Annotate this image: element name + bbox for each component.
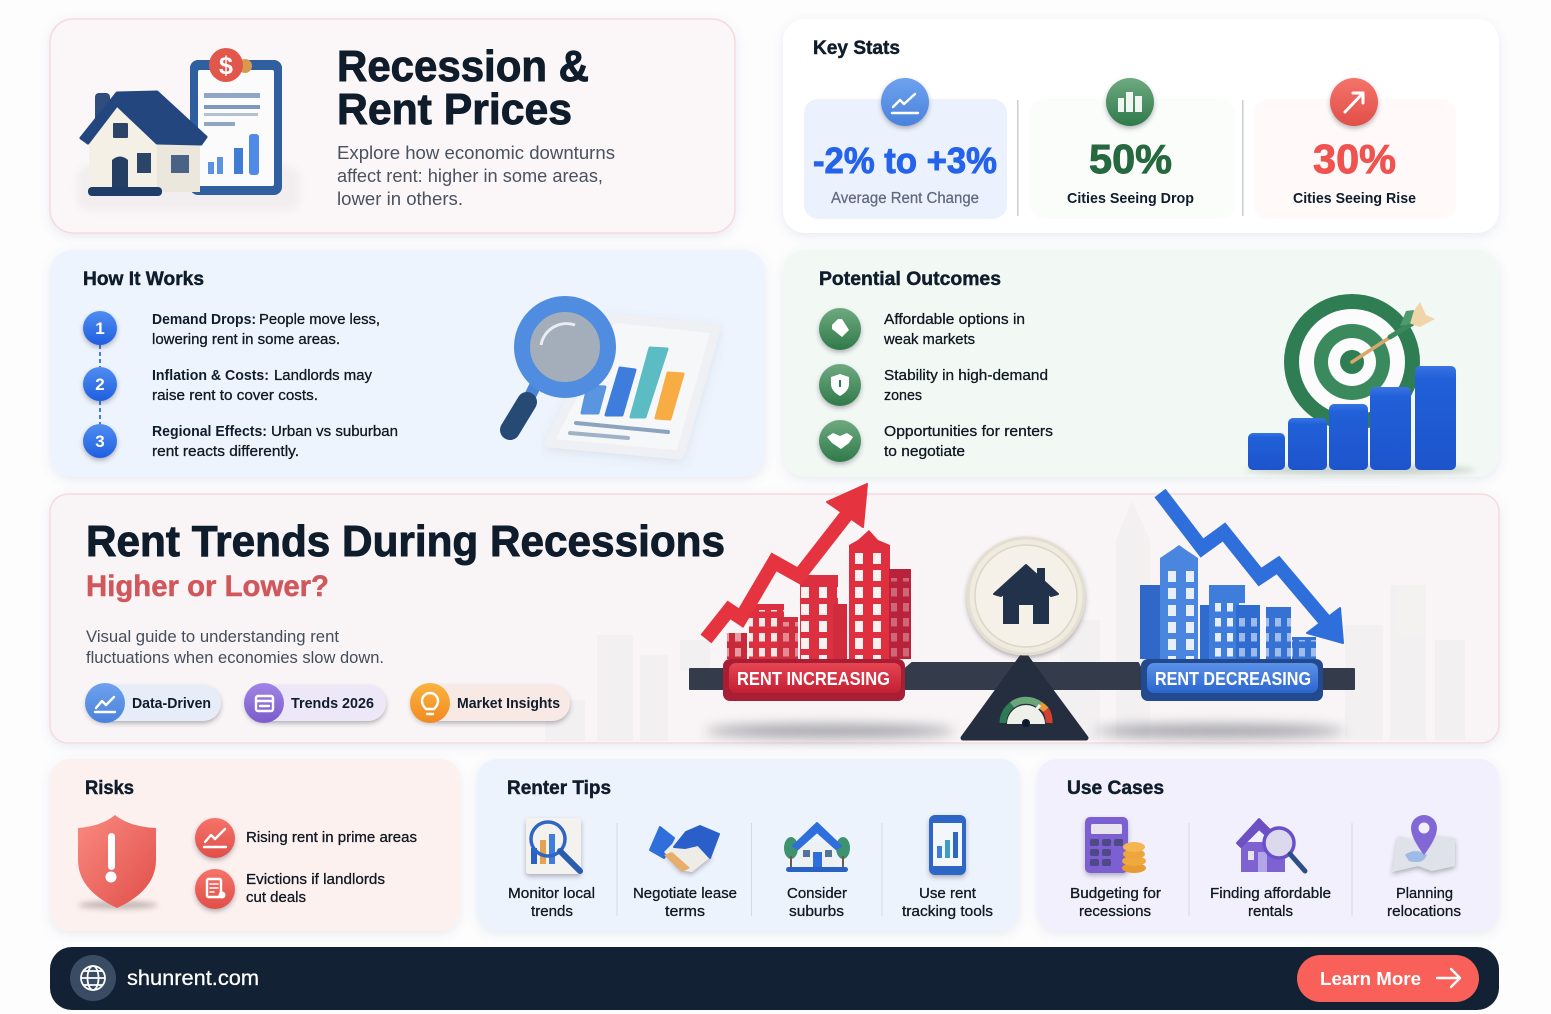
tip: monitor local trends: Monitor local [508,886,595,902]
outcome 2: zones [884,388,922,404]
risk 2: cut deals [246,890,306,906]
tip: consider suburbs: suburbs [789,904,844,920]
step 2 [83,367,373,404]
step 2: raise rent to cover costs. [152,388,318,404]
description: fluctuations when economies slow down. [86,649,384,667]
step 3: rent reacts differently. [152,444,299,460]
step 1: Demand Drops: [152,312,256,328]
risk 2 [195,869,385,909]
outcome 1: weak markets [883,332,975,348]
tip: monitor local trends: trends [531,904,573,920]
use case: finding rentals: rentals [1248,904,1293,920]
step 3 [83,424,398,460]
outcome 2: Stability in high-demand [884,368,1048,384]
stat: cities seeing rise: Cities Seeing Rise [1293,190,1416,207]
use case: budgeting [1070,817,1161,920]
illustration: magnifier over report [510,304,716,455]
button: learn more [1297,955,1479,1002]
illustration: target and rising bars [1245,294,1475,475]
step 3: Regional Effects: [152,424,267,440]
stat: average rent change: -2% to +3% [813,140,997,181]
heading: renter tips: Renter Tips [507,777,611,799]
panel: renter tips [477,759,1020,931]
label: rent decreasing [1141,659,1323,701]
pill: trends 2026: Trends 2026 [291,696,374,712]
red rising arrow [706,484,867,639]
use case: budgeting: recessions [1079,904,1151,920]
tip: negotiate lease terms [633,826,737,920]
outcome 3: to negotiate [884,444,965,460]
illustration: house with clipboard: $ [219,52,233,80]
risk 1: Rising rent in prime areas [246,830,417,846]
use case: planning relocations: relocations [1387,904,1461,920]
button: learn more: Learn More [1320,968,1421,989]
tip: negotiate lease terms: Negotiate lease [633,886,737,902]
panel: rent trends hero [50,484,1499,743]
icon: globe [70,955,116,1001]
outcome 3: Opportunities for renters [884,424,1053,440]
label: rent decreasing: RENT DECREASING [1155,669,1311,689]
illustration: rent balance scale [690,484,1354,738]
step 1 [83,311,380,348]
beam [690,663,1354,689]
title: Recession & [337,42,589,91]
tip: consider suburbs [784,823,850,920]
tip: consider suburbs: Consider [787,886,847,902]
fulcrum [963,654,1086,738]
panel: hero [50,19,735,233]
stat: average rent change [804,78,1007,219]
pill: trends 2026 [244,683,386,723]
risk 2: Evictions if landlords [246,872,385,888]
outcome 1 [819,308,1025,350]
subtitle [337,142,615,209]
outcome 3 [819,420,1053,462]
use case: finding rentals: Finding affordable [1210,886,1331,902]
pill: market insights [410,683,570,723]
step 2: Inflation & Costs: [152,368,269,384]
footer bar [50,947,1499,1010]
stat: cities seeing drop: 50% [1089,136,1172,182]
stat: cities seeing drop [1030,78,1235,219]
gauge [1003,700,1049,727]
panel: use cases [1037,759,1499,931]
tip: monitor local trends [508,818,595,920]
label: rent increasing [723,659,905,701]
stat: cities seeing rise [1254,78,1456,219]
tip: negotiate lease terms: terms [665,904,705,920]
heading: potential outcomes: Potential Outcomes [819,268,1001,290]
stat: cities seeing rise: 30% [1313,136,1396,182]
house medallion [968,538,1084,654]
pill: data-driven [85,683,221,723]
pill: data-driven: Data-Driven [132,696,211,712]
outcome 2 [819,364,1048,406]
blue buildings [1140,545,1316,659]
panel: how it works [50,250,765,477]
tip: use rent tracking tools: Use rent [919,886,976,902]
title: rent trends: Rent Trends During Recessions [86,517,725,566]
panel: potential outcomes [783,250,1499,477]
step 3: Urban vs suburban [271,424,398,440]
red buildings [727,530,911,659]
subtitle: higher or lower: Higher or Lower? [86,570,329,603]
step 2: Landlords may [274,368,373,384]
title [337,42,589,134]
description: Visual guide to understanding rent [86,628,339,646]
tip: use rent tracking tools [902,815,993,920]
panel: key stats [783,19,1499,233]
pill: market insights: Market Insights [457,696,560,712]
use case: finding rentals [1210,819,1331,920]
website: shunrent.com [127,967,259,990]
subtitle: lower in others. [337,188,463,209]
step 1: People move less, [259,312,380,328]
step 3: 3 [95,432,105,451]
blue falling arrow [1160,493,1343,643]
use case: budgeting: Budgeting for [1070,886,1161,902]
icon: shield alert [78,815,158,909]
use case: planning relocations: Planning [1396,886,1453,902]
illustration: house with clipboard [76,48,301,212]
use case: planning relocations [1387,815,1461,920]
step 2: 2 [95,375,105,394]
tip: use rent tracking tools: tracking tools [902,904,993,920]
heading: use cases: Use Cases [1067,777,1164,799]
step 1: 1 [95,319,105,338]
stat: average rent change: Average Rent Change [831,190,979,207]
stat: cities seeing drop: Cities Seeing Drop [1067,190,1194,207]
description [86,628,384,667]
outcome 1: Affordable options in [884,312,1025,328]
heading: how it works: How It Works [83,268,204,290]
label: rent increasing: RENT INCREASING [737,669,890,689]
subtitle: Explore how economic downturns [337,142,615,163]
panel: risks [50,759,460,931]
heading: key stats: Key Stats [813,37,900,59]
title: Rent Prices [337,85,572,134]
subtitle: affect rent: higher in some areas, [337,165,603,186]
step 1: lowering rent in some areas. [152,332,340,348]
risk 1 [195,818,417,858]
heading: risks: Risks [85,777,134,799]
